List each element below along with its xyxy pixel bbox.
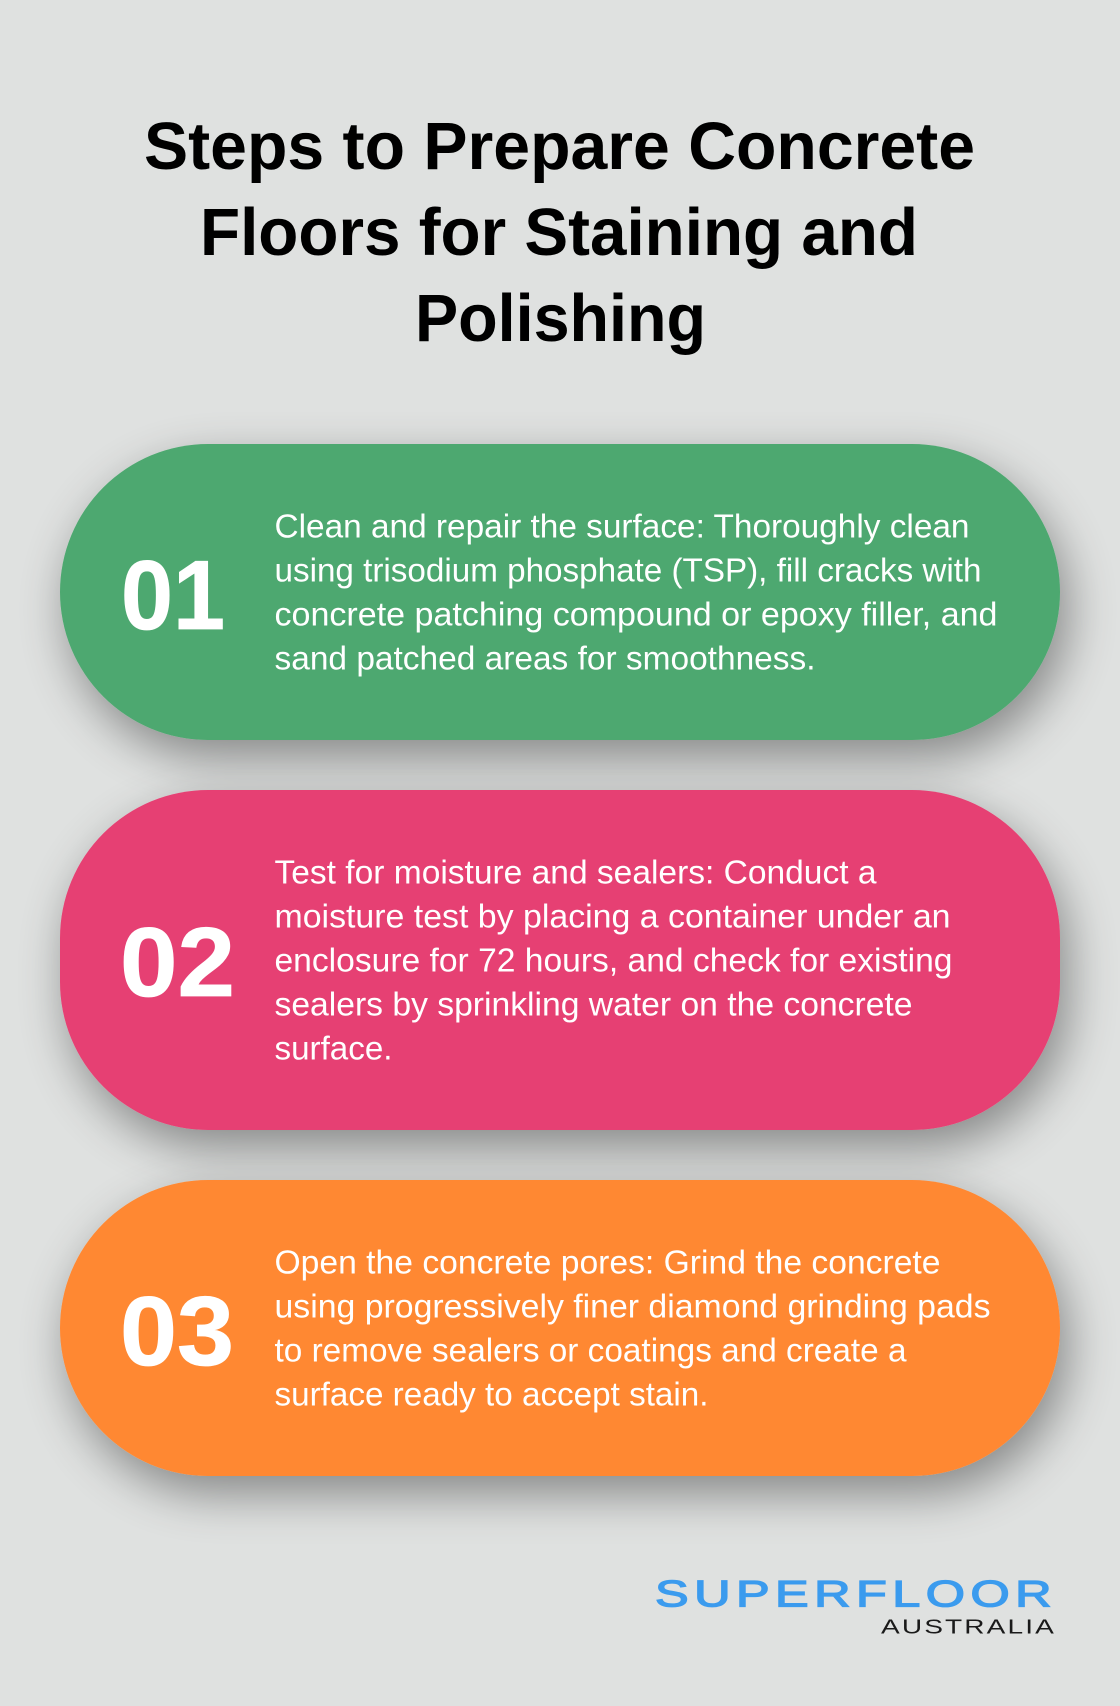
pill background: green [60,444,1060,740]
title [144,109,975,356]
step 2 text block: surface. [274,1030,392,1068]
step 3 text block: Open the concrete pores: Grind the concrete [274,1244,940,1282]
step 3 text block [274,1244,990,1414]
step 3 text block: surface ready to accept stain. [274,1376,708,1414]
step 1 text block: Clean and repair the surface: Thoroughly clean [274,508,970,546]
step 2 text block: enclosure for 72 hours, and check for existing [274,942,952,980]
step 2 text block: sealers by sprinkling water on the concrete [274,986,912,1024]
logo: Superfloor Australia: SUPERFLOOR [655,1574,1057,1614]
title: Polishing [415,281,706,356]
step 3 text block: using progressively finer diamond grinding pads [274,1288,990,1326]
step 3 text block: to remove sealers or coatings and create a [274,1332,907,1370]
step number 03: 03 [120,1276,234,1386]
step 1 text block: concrete patching compound or epoxy filler, and [274,596,998,634]
panel: step 3 [60,1180,1060,1476]
panel: step 2 [60,790,1060,1130]
step number 01: 01 [121,540,225,650]
step 2 text block [274,854,952,1068]
step 2 text block: moisture test by placing a container under an [274,898,951,936]
step 1 text block: sand patched areas for smoothness. [274,640,816,678]
pill background: orange [60,1180,1060,1476]
panel: step 1 [60,444,1060,740]
title: Floors for Staining and [200,195,918,270]
logo: Superfloor Australia: AUSTRALIA [881,1616,1056,1638]
logo: Superfloor Australia [655,1574,1057,1638]
pill background: pink [60,790,1060,1130]
step 1 text block [274,508,998,678]
title: Steps to Prepare Concrete [144,109,975,184]
step number 02: 02 [120,907,235,1017]
step 1 text block: using trisodium phosphate (TSP), fill cracks with [274,552,982,590]
step 2 text block: Test for moisture and sealers: Conduct a [274,854,877,892]
